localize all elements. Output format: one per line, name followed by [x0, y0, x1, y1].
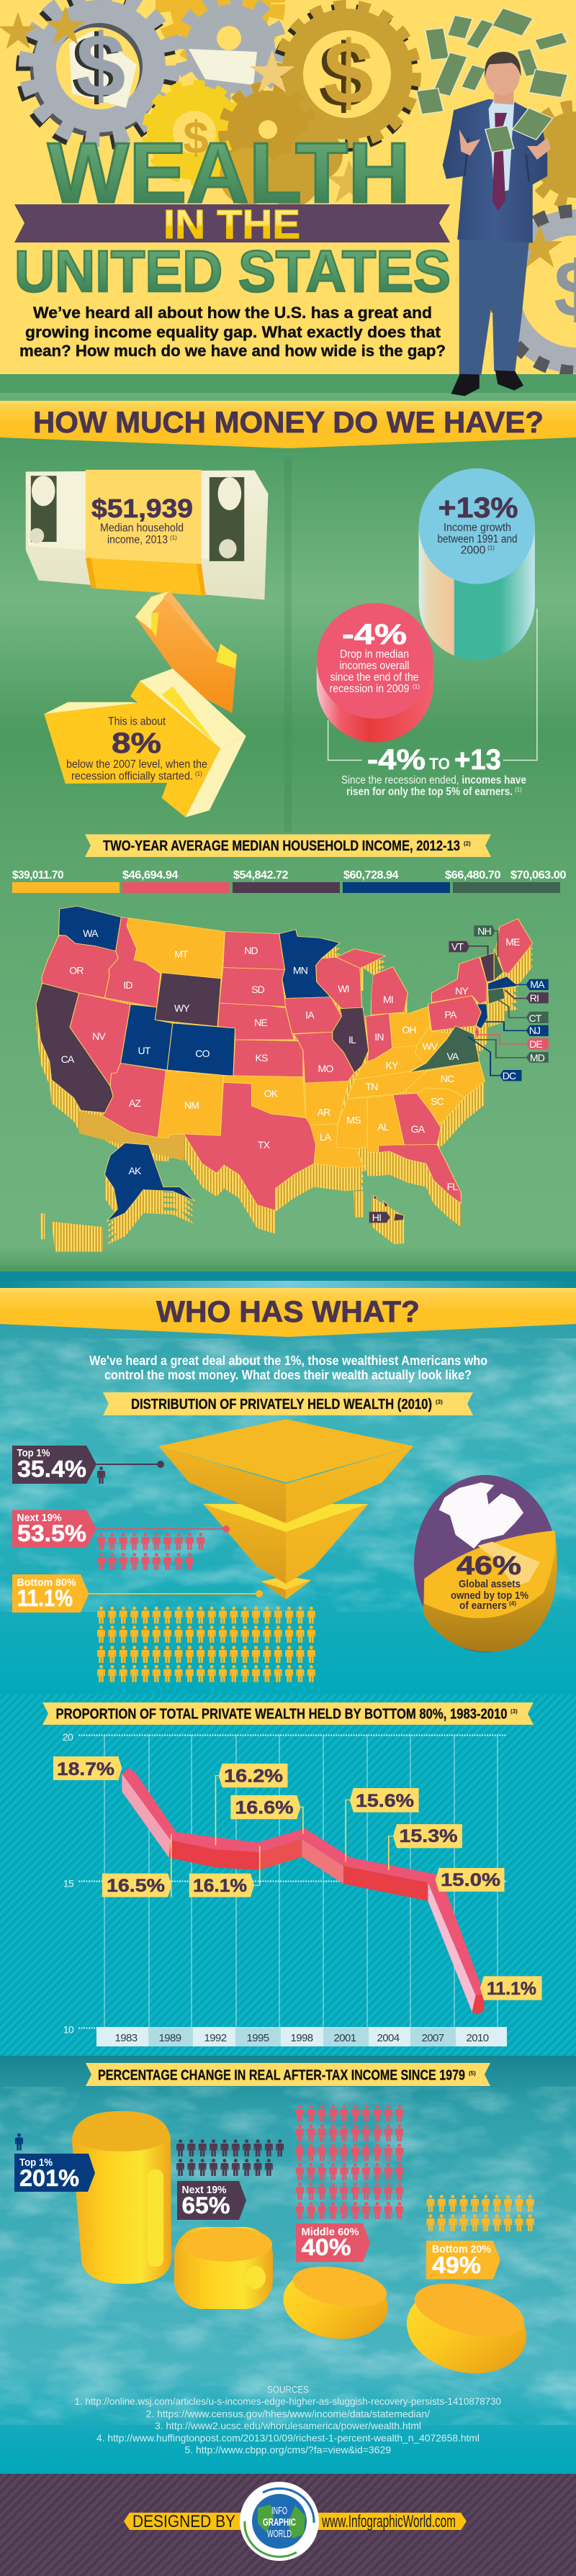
data values: 15.0% [441, 1870, 500, 1890]
ribbon heading: percentage change: (5) [469, 2070, 476, 2077]
intro text: growing income equality gap. What exactly does that [25, 323, 441, 341]
state labels: FL [447, 1181, 458, 1192]
icons: people next 19% purple [176, 2139, 284, 2176]
text: range: -4% [367, 744, 426, 776]
year bar: 1992 [204, 2032, 227, 2044]
ribbon heading: median household income [85, 835, 491, 857]
chart: private wealth line [53, 1731, 542, 2046]
heading: WHO HAS WHAT? [156, 1294, 420, 1328]
tag: next 19% 65%: 65% [181, 2192, 230, 2218]
gear: silver with dollar [24, 0, 171, 142]
text: -4%: incomes overall [340, 660, 409, 672]
sources: 3. http://www2.ucsc.edu/whorulesamerica/power/wealth.html [155, 2420, 421, 2431]
bracket [328, 609, 537, 761]
hair [485, 52, 521, 78]
tag: top 1%: 35.4% [17, 1456, 86, 1482]
tag: next 19% 65%: Next 19% [181, 2184, 226, 2196]
logo: Infographic World: INFO [271, 2505, 287, 2517]
tag: bottom 80%: Bottom 80% [17, 1577, 76, 1589]
axis labels [63, 1731, 74, 2035]
neck and head [494, 88, 513, 104]
state labels: NE [254, 1017, 267, 1028]
ribbon heading: proportion [42, 1702, 534, 1725]
tag: next 19%: 53.5% [17, 1520, 86, 1546]
footer: designed by: DESIGNED BY [132, 2512, 235, 2531]
state labels: WY [174, 1002, 190, 1014]
illustration: gears and stars [0, 0, 576, 372]
state labels: OK [264, 1088, 279, 1099]
text: range note [341, 774, 526, 798]
text: 8 percent: below the 2007 level, when the [66, 758, 207, 771]
state labels: LA [320, 1131, 332, 1143]
money bills floating [416, 8, 567, 114]
panel: income range cylinders [317, 468, 537, 798]
state labels: NJ [529, 1025, 540, 1036]
year bar: 2010 [467, 2032, 489, 2044]
map states [36, 906, 533, 1222]
panel divider [284, 458, 292, 832]
title: Wealth: WEALTH [48, 125, 410, 221]
legend: income scale: $54,842.72 [233, 869, 289, 881]
data values: 16.6% [235, 1797, 294, 1818]
state labels: ID [123, 979, 132, 991]
background: income change section [0, 2056, 576, 2474]
state labels: UT [138, 1045, 151, 1056]
tag: top 1%: Top 1% [17, 1447, 50, 1459]
state labels: VA [446, 1051, 459, 1062]
text: median income label [100, 522, 184, 546]
tag: top 1% 201%: 201% [19, 2165, 79, 2191]
gear: top gold [163, 0, 278, 62]
intro text [19, 304, 446, 360]
intro text: who has what: We've heard a great deal about the 1%, those wealthiest Americans who [89, 1353, 487, 1368]
state labels: VT [451, 941, 464, 953]
tag: bottom 80% [12, 1574, 263, 1613]
legend: income scale [12, 869, 567, 893]
tag: middle 60% 40%: 40% [301, 2234, 351, 2260]
data values: 16.2% [224, 1766, 283, 1786]
text: range: TO [429, 755, 450, 773]
state labels: NV [92, 1030, 106, 1042]
state labels: MD [530, 1052, 545, 1063]
shoes [451, 371, 523, 396]
sources [75, 2383, 501, 2455]
ribbon heading: median household income: (2) [464, 840, 471, 847]
data tags [53, 1756, 542, 2000]
state labels: NM [184, 1099, 199, 1111]
state labels: IL [348, 1034, 356, 1046]
state labels: TN [365, 1081, 378, 1092]
pants [459, 240, 529, 375]
year bar [96, 2027, 507, 2046]
chart: bottom 20% cylinder [399, 2274, 534, 2384]
text: 8 percent: recession officially started. [71, 770, 193, 783]
background: header yellow [0, 0, 576, 374]
text: median income label: income, 2013 [107, 534, 168, 546]
ribbon heading: percentage change: PERCENTAGE CHANGE IN REAL AFTER-TAX INCOME SINCE 1979 [98, 2068, 465, 2084]
axis labels: 10 [63, 2023, 74, 2035]
tag: middle 60% 40%: Middle 60% [301, 2226, 359, 2238]
coin text [451, 1551, 528, 1612]
legend: income scale: $39,011.70 [12, 869, 64, 881]
state labels: AZ [129, 1097, 141, 1109]
state labels: WV [423, 1040, 438, 1052]
icon: orange arrow [135, 591, 237, 713]
gear: yellow with dollar [148, 86, 240, 178]
state labels: MA [530, 979, 545, 990]
state labels: IN [374, 1031, 384, 1043]
texture: teal section mottling [0, 1338, 576, 1612]
year bar: 1995 [247, 2032, 269, 2044]
text: range: +13 [454, 744, 501, 776]
state labels: SC [431, 1095, 444, 1107]
green strip [0, 374, 576, 401]
pyramid middle tier [203, 1504, 369, 1584]
state labels: DC [503, 1070, 516, 1081]
ribbon heading: distribution [103, 1392, 473, 1415]
chart: wealth pyramid [158, 1419, 413, 1600]
intro text: who has what [89, 1353, 487, 1382]
state labels: MS [346, 1114, 361, 1125]
section transition strip [0, 1266, 576, 1289]
tag: bottom 80%: 11.1% [17, 1585, 73, 1611]
chart grid [78, 1735, 506, 2028]
icons: people next 19% [97, 1533, 204, 1570]
text: 8 percent [66, 715, 207, 783]
text: +13%: +13% [438, 492, 518, 524]
state labels: HI [372, 1212, 381, 1223]
banner: How much money do we have [0, 401, 576, 448]
hands [459, 130, 551, 160]
state labels: MT [174, 948, 189, 960]
text: median income label: Median household [100, 522, 184, 534]
text: -4% [330, 619, 420, 695]
icon: stars [0, 6, 562, 268]
text: range [367, 744, 501, 776]
sources: SOURCES [267, 2383, 309, 2395]
state labels: WI [338, 983, 349, 994]
text: +13%: Income growth [444, 522, 511, 534]
icons: people bottom 80% [97, 1607, 315, 1682]
title: United States: UNITED STATES [14, 239, 451, 304]
icon: money stack [26, 470, 268, 599]
state labels: TX [258, 1139, 271, 1151]
shirt [489, 99, 514, 194]
title ribbon [14, 204, 450, 242]
state labels: NH [477, 925, 491, 937]
map leader lines [469, 931, 529, 1076]
legend: income scale: $60,728.94 [343, 869, 399, 881]
state labels: IA [305, 1009, 315, 1020]
axis labels: 15 [63, 1878, 74, 1890]
ribbon heading: distribution: DISTRIBUTION OF PRIVATELY HELD WEALTH (2010) [131, 1397, 432, 1412]
footer background [0, 2474, 576, 2576]
text: range note: risen for only the top 5% of earners. [346, 786, 513, 798]
coin shape [414, 1475, 557, 1652]
3D trend line [122, 1768, 484, 2015]
intro text: who has what: control the most money. What does their wealth actually look like? [104, 1368, 472, 1382]
sources: 1. http://online.wsj.com/articles/u-s-incomes-edge-higher-as-sluggish-recovery-persists-1410878730 [75, 2395, 501, 2407]
coin text: 46% [456, 1551, 521, 1580]
state labels: CO [195, 1048, 210, 1059]
map extrusion [36, 912, 533, 1252]
chart: middle 60% cylinder [279, 2260, 392, 2346]
state labels: MI [383, 994, 393, 1005]
state labels: GA [411, 1123, 426, 1135]
illustration: businessman [443, 52, 553, 396]
panel: median income [26, 470, 268, 599]
background: teal section [0, 1317, 576, 1695]
ribbon heading: median household income: TWO-YEAR AVERAGE MEDIAN HOUSEHOLD INCOME, 2012-13 [103, 838, 460, 854]
state labels: NC [441, 1073, 454, 1084]
year bar: 1989 [159, 2032, 181, 2044]
year bar: 1998 [291, 2032, 313, 2044]
sleeve creases [464, 137, 529, 182]
legend: income scale: $66,480.70 [445, 869, 501, 881]
axis labels: 20 [63, 1731, 73, 1743]
texture: income section mottling [0, 2087, 576, 2425]
gear: silver with dollar: $ [72, 18, 121, 117]
gear: yellow with dollar: $ [183, 112, 209, 163]
gear: silver with dollar: $ [76, 17, 125, 116]
logo: Infographic World: WORLD [267, 2528, 292, 2540]
ribbon heading: percentage change [86, 2063, 490, 2086]
paper band [86, 470, 202, 564]
tag: middle 60% 40% [296, 2223, 370, 2262]
intro text: We’ve heard all about how the U.S. has a great and [33, 304, 432, 322]
cylinder: blue +13% [419, 468, 535, 661]
legend: income scale: $46,694.94 [122, 869, 179, 881]
gear: small gold [220, 86, 343, 207]
gear: gold with dollar: $ [324, 24, 373, 123]
lake Michigan gap [364, 968, 373, 1015]
state labels: OH [402, 1024, 416, 1035]
cylinder: red -4% [317, 603, 433, 743]
coin text: Global assets [459, 1578, 521, 1590]
chart: global assets coin [414, 1475, 557, 1652]
data values: 15.6% [356, 1791, 414, 1811]
logo: Infographic World: GRAPHIC [263, 2516, 296, 2529]
coin text: of earners [459, 1600, 507, 1612]
state labels: CT [528, 1012, 542, 1024]
chart: top 1% cylinder [72, 2111, 171, 2284]
state labels: OR [69, 964, 84, 976]
text: range note: Since the recession ended, incomes have [341, 774, 526, 786]
year bar: 2004 [377, 2032, 400, 2044]
heading: HOW MUCH MONEY DO WE HAVE? [33, 405, 544, 439]
state labels: DE [529, 1038, 542, 1050]
sources: 2. https://www.census.gov/hhes/www/income/data/statemedian/ [145, 2408, 430, 2419]
leader lines [171, 1776, 393, 1897]
state labels: NY [455, 985, 469, 997]
state labels: ME [505, 936, 520, 948]
gear: top silver [180, 0, 281, 99]
text: +13% [438, 492, 518, 557]
state tags [369, 925, 549, 1223]
text: -4%: Drop in median [340, 648, 409, 661]
state labels: PA [444, 1009, 457, 1020]
icon: person top 1% blue [15, 2133, 23, 2150]
tag: bottom 20% 49%: 49% [432, 2252, 481, 2278]
state labels: WA [83, 928, 99, 939]
state labels: MO [318, 1063, 333, 1074]
footer: website: www.InfographicWorld.com [321, 2512, 456, 2531]
data values: 16.1% [193, 1876, 247, 1896]
data values: 16.5% [107, 1876, 165, 1896]
icon: person top 1% [97, 1466, 105, 1484]
text: median income value: $51,939 [91, 494, 193, 523]
tag: top 1% [12, 1446, 164, 1484]
year bar: 2001 [334, 2032, 356, 2044]
data values: 18.7% [57, 1759, 114, 1779]
intro text: mean? How much do we have and how wide is the gap? [19, 342, 446, 360]
tag: next 19% 65% [177, 2181, 246, 2220]
text: +13%: 2000 [461, 544, 486, 557]
panel: 8 percent arrow [44, 668, 246, 817]
text: -4%: since the end of the [330, 671, 419, 684]
sources: 5. http://www.cbpp.org/cms/?fa=view&id=3629 [184, 2444, 391, 2455]
chart: next 19% cylinder [174, 2227, 273, 2309]
coin text: owned by top 1% [451, 1589, 528, 1602]
state labels: SD [251, 984, 265, 995]
text: -4%: recession in 2009 [330, 683, 409, 695]
jacket [443, 99, 547, 243]
text: +13%: between 1991 and [438, 533, 517, 545]
text: range note: (1) [515, 786, 522, 793]
sources: 4. http://www.huffingtonpost.com/2013/10/09/richest-1-percent-wealth_n_4072658.html [96, 2432, 480, 2444]
text: -4%: (1) [413, 684, 420, 690]
coin text: (4) [509, 1600, 516, 1607]
text: 8 percent: This is about [108, 715, 166, 728]
gear: right gold [527, 106, 576, 204]
state labels: ND [244, 945, 258, 956]
data values: 15.3% [399, 1826, 458, 1846]
text: 8 percent: (1) [195, 771, 202, 777]
state labels: AL [377, 1121, 390, 1133]
pyramid top tier [158, 1419, 413, 1523]
ribbon heading: distribution: (3) [436, 1399, 443, 1405]
ribbon heading: proportion: (3) [510, 1708, 518, 1715]
tag: top 1% 201% [14, 2154, 95, 2192]
tag: next 19% [12, 1510, 230, 1548]
state labels: MN [293, 964, 307, 976]
text: median income label: (1) [170, 535, 177, 541]
state labels: KS [255, 1052, 268, 1063]
background: green section [0, 432, 576, 1271]
icon: yellow arrow [44, 668, 246, 817]
state labels [61, 925, 545, 1223]
text: -4%: -4% [342, 619, 407, 650]
logo: Infographic World [240, 2482, 319, 2561]
map: United States median income [36, 906, 549, 1252]
background: hatched chart section [0, 1695, 576, 2056]
icons: people middle 60% pink [296, 2105, 403, 2219]
year bar: 1983 [115, 2032, 138, 2044]
gear: gold with dollar: $ [319, 27, 368, 126]
tag: top 1% 201%: Top 1% [19, 2157, 53, 2169]
data values: 11.1% [487, 1979, 536, 1999]
pyramid bottom tier [261, 1576, 311, 1600]
tag: next 19%: Next 19% [17, 1512, 62, 1524]
text: +13%: (1) [487, 545, 495, 551]
icons: people bottom 20% orange [426, 2195, 534, 2231]
gear: right silver [495, 211, 576, 372]
state labels: AK [128, 1165, 142, 1176]
title: In the: IN THE [163, 201, 300, 248]
data values [57, 1759, 536, 1999]
footer: website [313, 2512, 467, 2531]
gear: gold with dollar [279, 8, 413, 144]
text: 8 percent: 8% [112, 727, 161, 759]
legend: income scale: $70,063.00 [510, 869, 567, 881]
banner: Who has what [0, 1288, 576, 1337]
tag: bottom 20% 49%: Bottom 20% [432, 2244, 491, 2255]
tie [492, 113, 507, 211]
year bar: 2007 [422, 2032, 444, 2044]
bills in hands [485, 108, 553, 152]
state labels: RI [530, 992, 539, 1004]
state labels: AR [318, 1107, 330, 1118]
tag: bottom 20% 49% [426, 2241, 500, 2280]
state labels: KY [385, 1059, 399, 1071]
state labels: CA [61, 1053, 75, 1065]
